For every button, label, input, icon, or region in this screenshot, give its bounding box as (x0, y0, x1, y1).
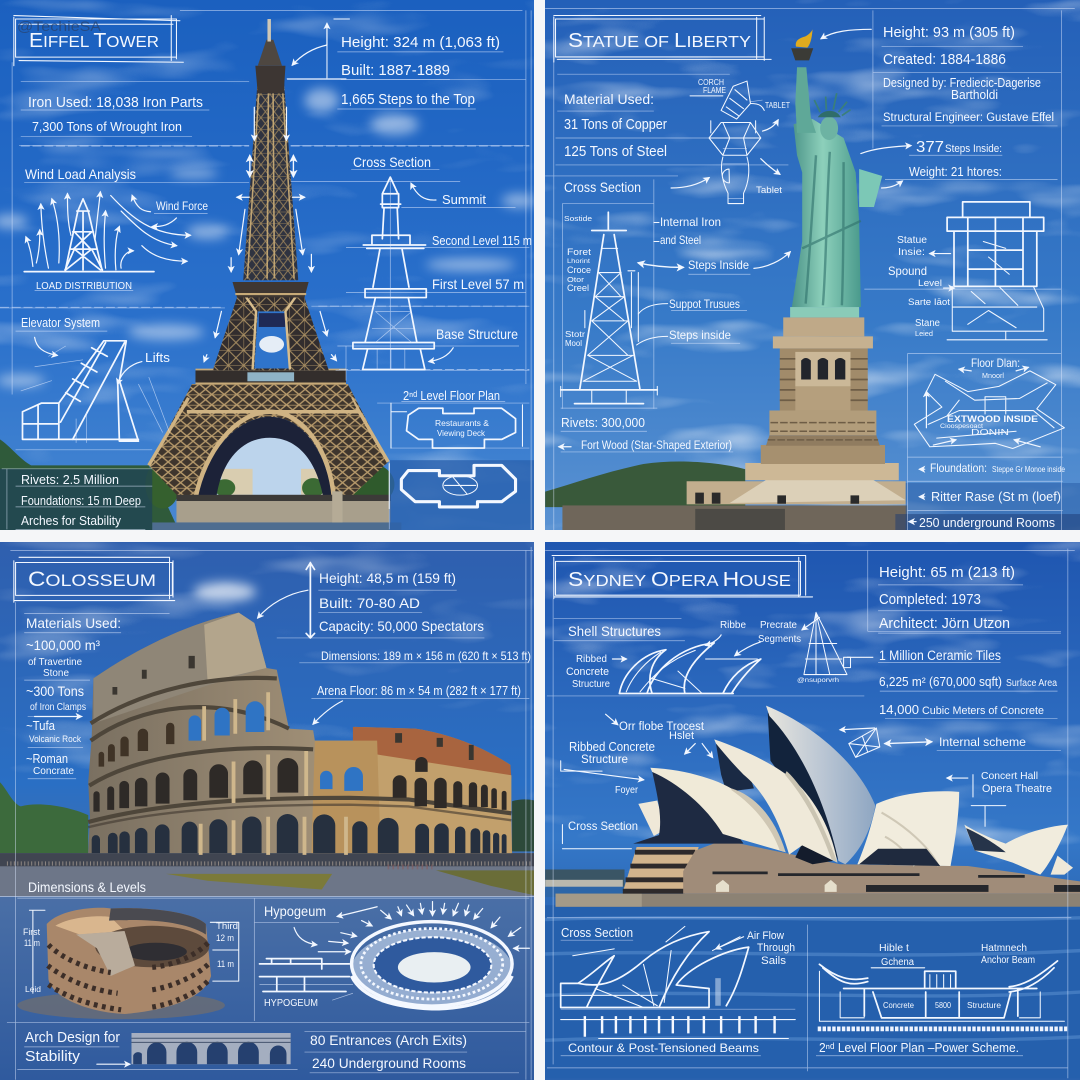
text: rivets and foundations: Arches for Stability (21, 513, 121, 528)
text: height and build facts: Built: 1887-1889 (341, 62, 450, 79)
text: materials used: Concrate (33, 765, 74, 777)
diagram: lower cross section (561, 926, 795, 1055)
text: height and completion: 6,225 m² (670,000 sqft) (879, 674, 1002, 689)
title: Eiffel Tower: @TechieSA (17, 18, 102, 34)
diagram: arch design (25, 1030, 291, 1065)
diagram: cross section tower: Base Structure (436, 326, 518, 342)
diagram: shell structures: Ribbed (576, 654, 607, 665)
title: Statue of Liberty (554, 16, 771, 62)
text: rivets and foundations: Rivets: 2.5 Million (21, 472, 119, 487)
text: materials used: Stone (43, 668, 69, 679)
text: opera callouts: Ribbed Concrete (569, 740, 655, 754)
diagram: cross section left tower: Otor (567, 277, 585, 284)
diagram: floor plan power scheme: Anchor Beam (981, 955, 1035, 966)
diagram: 2nd level floor plan (389, 388, 522, 509)
diagram: cross section left tower: Suppot Trusues (669, 297, 740, 311)
diagram: shell structures: Concrete (566, 666, 609, 678)
text: opera callouts: Structure (581, 752, 628, 766)
diagram: elevator system (21, 316, 171, 443)
diagram: lower cross section: Contour & Post-Tensioned Beams (568, 1041, 759, 1055)
photo: Eiffel Tower (0, 19, 536, 533)
text: opera callouts: Foyer (615, 785, 639, 796)
diagram: cross section tower (353, 154, 532, 370)
text: rivets, fort and foundation: Fort Wood (Star-Shaped Exterior) (581, 440, 732, 452)
diagram: star fort floor plan: Mnoorl (982, 373, 1004, 380)
diagram: internal section right (888, 202, 1047, 340)
photo: Statue of Liberty (545, 29, 1080, 535)
photo: Colosseum (0, 582, 540, 896)
title: Sydney Opera House: SYDNEY OPERA HOUSE (568, 569, 791, 591)
text: materials used: ~Tufa (26, 718, 56, 733)
text: opera callouts: Concert Hall (981, 770, 1038, 782)
icon: internal scheme truss (849, 728, 932, 757)
diagram: cross section left tower: Steps inside (669, 328, 731, 342)
text: opera callouts: Orr flobe Trocest (619, 721, 705, 733)
diagram: shell structures (566, 612, 850, 694)
text: height and build facts: 1,665 Steps to the Top (341, 91, 475, 108)
diagram: internal section right: Sarte Iāot (908, 297, 951, 307)
text: height and completion: Cubic Meters of Concrete (922, 705, 1044, 717)
title: Colosseum (14, 557, 175, 602)
diagram: cross section tower: Summit (442, 192, 486, 207)
diagram: wind load analysis: LOAD DISTRIBUTION (36, 280, 132, 292)
text: height and completion: 14,000 (879, 702, 919, 717)
diagram: internal section right: Spound (888, 264, 927, 278)
text: material used: 125 Tons of Steel (564, 144, 667, 160)
text: materials used: Materials Used: (26, 615, 121, 631)
diagram: cross section left tower: Mool (565, 339, 582, 348)
diagram: lower cross section: Sails (761, 955, 787, 967)
diagram: star fort floor plan: DONIN (971, 428, 1009, 437)
diagram: lower cross section: Air Flow (747, 930, 784, 942)
diagram: shell structures: Precrate (760, 620, 797, 631)
panel: Eiffel Tower (0, 0, 536, 533)
title: Eiffel Tower: EIFFEL TOWER (29, 30, 159, 52)
diagram: torch sketch: FLAME (703, 86, 726, 95)
text: material used: Material Used: (564, 91, 654, 107)
diagram: star fort floor plan: EXTWOOD INSIDE (947, 414, 1038, 424)
diagram: floor plan power scheme: Concrete (883, 1001, 915, 1010)
text: rivets, fort and foundation (561, 415, 1065, 530)
diagram: floor plan power scheme: 2ⁿᵈ Level Floor Plan –Power Scheme. (819, 1041, 1019, 1055)
text: height and creators: Height: 93 m (305 ft) (883, 24, 1015, 41)
text: height and completion: 1 Million Ceramic Tiles (879, 648, 1001, 663)
diagram: cross section tower: Second Level 115 m (432, 233, 532, 248)
diagram: dimensions and levels: 11 m (24, 938, 40, 948)
text: key dimensions: Dimensions: 189 m × 156 m (620 ft × 513 ft) (321, 649, 531, 663)
shell: middle (714, 739, 837, 864)
diagram: torch sketch (698, 78, 790, 204)
photo: Sydney Opera House (545, 706, 1080, 1078)
text: height and creators: Designed by: Frediecic-Dagerise (883, 76, 1041, 90)
diagram: 2nd level floor plan: Viewing Deck (437, 428, 486, 438)
text: height and completion: Completed: 1973 (879, 591, 981, 608)
diagram: elevator system: Elevator System (21, 316, 100, 330)
text: materials used: ~Roman (26, 751, 68, 766)
text: opera callouts: Internal scheme (939, 735, 1026, 749)
diagram: floor plan power scheme: Gchena (881, 957, 914, 968)
diagram: hypogeum (260, 902, 529, 1009)
diagram: elevator system: Lifts (145, 350, 171, 365)
title: Colosseum: COLOSSEUM (28, 568, 156, 591)
diagram: hypogeum: HYPOGEUM (264, 998, 318, 1009)
text: key dimensions (317, 570, 531, 698)
text: materials used: of Travertine (28, 657, 82, 668)
diagram: cross section left tower: and Steel (660, 233, 701, 247)
text: opera callouts: Opera Theatre (982, 783, 1052, 795)
blueprint frame lines (545, 9, 1075, 531)
diagram: hypogeum: Hypogeum (264, 903, 326, 919)
text: height and creators: Weight: 21 htores: (909, 164, 1002, 179)
text: rivets, fort and foundation: Steppe Gr Monoe inside (992, 465, 1065, 474)
text: height and creators (883, 24, 1054, 179)
diagram: shell structures: Ribbe (720, 620, 746, 631)
text: rivets and foundations: Foundations: 15 m Deep (21, 493, 141, 508)
text: iron used (28, 94, 203, 134)
text: materials used: ~300 Tons (26, 684, 84, 699)
diagram: cross section left tower: Creel (567, 283, 589, 294)
panel: Colosseum (0, 542, 540, 1080)
diagram: cross section left tower: Cross Section (564, 179, 641, 195)
text: height and creators: 377 (916, 139, 944, 156)
text: iron used: Iron Used: 18,038 Iron Parts (28, 94, 203, 111)
diagram: cross section left tower: Sostide (564, 214, 592, 223)
diagram: torch sketch: CORCH (698, 78, 724, 87)
panel: Statue of Liberty (545, 0, 1080, 535)
text: rivets, fort and foundation: Floundation: (930, 461, 987, 475)
diagram: internal section right: Insie: (898, 247, 925, 258)
diagram: internal section right: Level (918, 278, 942, 288)
text: height and completion (879, 564, 1057, 717)
diagram: dimensions and levels: Dimensions & Levels (28, 880, 146, 895)
text: entrances and rooms (310, 1032, 467, 1071)
text: height and creators: Created: 1884-1886 (883, 51, 1006, 68)
blueprint frame lines (7, 547, 533, 1080)
title: Statue of Liberty: STATUE OF LIBERTY (568, 30, 751, 52)
text: iron used: 7,300 Tons of Wrought Iron (32, 119, 182, 134)
text: height and build facts: Height: 324 m (1,063 ft) (341, 34, 500, 51)
text: opera callouts: Cross Section (568, 819, 638, 833)
diagram: 2nd level floor plan: 2ⁿᵈ Level Floor Plan (403, 388, 500, 403)
diagram: arch design: Arch Design for (25, 1030, 120, 1046)
diagram: floor plan power scheme: Hatmnech (981, 943, 1027, 954)
diagram: shell structures: Structure (572, 679, 610, 690)
text: materials used: ~100,000 m³ (26, 637, 100, 653)
diagram: dimensions and levels: First (23, 927, 40, 937)
text: key dimensions: Arena Floor: 86 m × 54 m (282 ft × 177 ft) (317, 683, 521, 698)
text: rivets, fort and foundation: 250 underground Rooms (919, 515, 1055, 530)
shell: right pair (857, 791, 1073, 875)
text: entrances and rooms: 240 Underground Rooms (312, 1055, 466, 1071)
text: materials used (26, 615, 121, 777)
text: entrances and rooms: 80 Entrances (Arch Exits) (310, 1032, 467, 1048)
shell: tall back (766, 706, 875, 864)
text: rivets, fort and foundation: Rivets: 300,000 (561, 415, 645, 430)
diagram: cross section left tower: Croce (567, 265, 591, 276)
diagram: wind load analysis: Wind Load Analysis (25, 166, 136, 182)
diagram: star fort floor plan: Cioospesoact (940, 424, 983, 430)
diagram: lower cross section: Cross Section (561, 926, 633, 940)
diagram: dimensions and levels: Leid (25, 985, 41, 994)
diagram: floor plan power scheme: Hible t (879, 943, 909, 954)
text: height and creators: Structural Engineer: Gustave Effel (883, 112, 1054, 124)
text: material used: 31 Tons of Copper (564, 117, 667, 133)
blueprint frame lines (0, 10, 531, 529)
text: height and build facts (341, 34, 500, 108)
text: key dimensions: Height: 48,5 m (159 ft) (319, 570, 456, 586)
diagram: cross section left tower (561, 179, 749, 404)
text: key dimensions: Capacity: 50,000 Spectators (319, 618, 484, 634)
title: Eiffel Tower (14, 16, 183, 66)
panel: Sydney Opera House (545, 542, 1080, 1080)
text: opera callouts: Hslet (669, 730, 694, 742)
diagram: shell structures: @nsuporvrh (797, 677, 839, 684)
diagram: internal section right: Statue (897, 235, 927, 246)
diagram: dimensions and levels (17, 880, 239, 1019)
diagram: star fort floor plan: Floor Dlan: (971, 356, 1020, 370)
text: height and creators: Bartholdi (951, 88, 998, 102)
text: height and completion: Height: 65 m (213 ft) (879, 564, 1015, 581)
text: material used (564, 94, 667, 156)
diagram: dimensions and levels: Third (216, 921, 238, 932)
diagram: torch sketch: Tablet (756, 185, 783, 195)
text: height and completion: Architect: Jörn Utzon (879, 615, 1010, 632)
diagram: internal section right: Leied (915, 331, 933, 338)
diagram: floor plan power scheme (818, 943, 1067, 1055)
text: height and completion: Surface Area (1006, 678, 1057, 689)
text: rivets and foundations (21, 472, 141, 528)
text: key dimensions: Built: 70-80 AD (319, 595, 420, 611)
diagram: internal section right: Stane (915, 318, 940, 329)
text: opera callouts (568, 721, 1052, 833)
diagram: dimensions and levels: 11 m (217, 959, 234, 970)
diagram: shell structures: Shell Structures (568, 623, 661, 639)
diagram: cross section tower: Cross Section (353, 154, 431, 170)
diagram: cross section left tower: Stotr (565, 330, 585, 339)
diagram: torch sketch: TABLET (765, 101, 790, 110)
diagram: cross section left tower: Internal Iron (660, 215, 721, 229)
text: materials used: of Iron Clamps (30, 702, 86, 713)
text: height and creators: Steps Inside: (945, 143, 1002, 155)
diagram: wind load analysis (24, 166, 208, 292)
diagram: cross section tower: First Level 57 m (432, 276, 524, 292)
diagram: dimensions and levels: 12 m (216, 933, 234, 944)
text: materials used: Volcanic Rock (29, 734, 81, 745)
diagram: cross section left tower: Foret (567, 247, 591, 258)
diagram: shell structures: Segments (758, 634, 801, 645)
diagram: 2nd level floor plan: Restaurants & (435, 418, 489, 428)
diagram: floor plan power scheme: Structure (967, 1001, 1002, 1010)
title: Sydney Opera House (552, 556, 813, 599)
shell: front (633, 768, 786, 852)
diagram: arch design: Stability (25, 1049, 81, 1065)
text: rivets, fort and foundation: Ritter Rase (St m (loef) (931, 489, 1061, 504)
diagram: lower cross section: Through (757, 942, 795, 954)
diagram: floor plan power scheme: 5800 (935, 1001, 951, 1010)
diagram: wind load analysis: Wind Force (156, 199, 208, 213)
diagram: cross section left tower: Steps Inside (688, 258, 749, 272)
diagram: cross section left tower: Lhorint (567, 258, 590, 265)
blueprint frame lines (545, 549, 1075, 1078)
diagram: star fort floor plan (914, 356, 1064, 448)
